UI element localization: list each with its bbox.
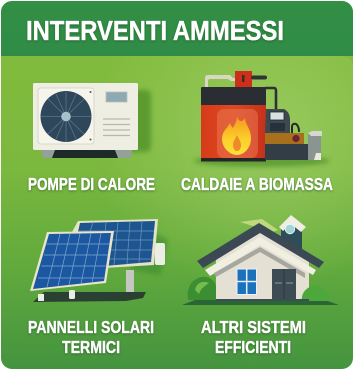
label: altri sistemi efficienti: ALTRI SISTEMI	[201, 317, 306, 337]
panel: header band	[1, 1, 353, 56]
label: altri sistemi efficienti	[201, 317, 306, 357]
label: pannelli solari termici: TERMICI	[62, 337, 120, 357]
icon: heat pump outdoor unit	[33, 83, 151, 158]
label: pannelli solari termici	[28, 317, 154, 357]
label: altri sistemi efficienti: EFFICIENTI	[215, 337, 291, 357]
icon: solar panels	[30, 219, 168, 302]
label: pompe di calore: POMPE DI CALORE	[28, 174, 155, 194]
icon: efficient house	[182, 215, 339, 305]
icon: biomass boiler	[194, 71, 330, 167]
title: INTERVENTI AMMESSI	[26, 15, 284, 46]
label: pannelli solari termici: PANNELLI SOLARI	[28, 317, 154, 337]
